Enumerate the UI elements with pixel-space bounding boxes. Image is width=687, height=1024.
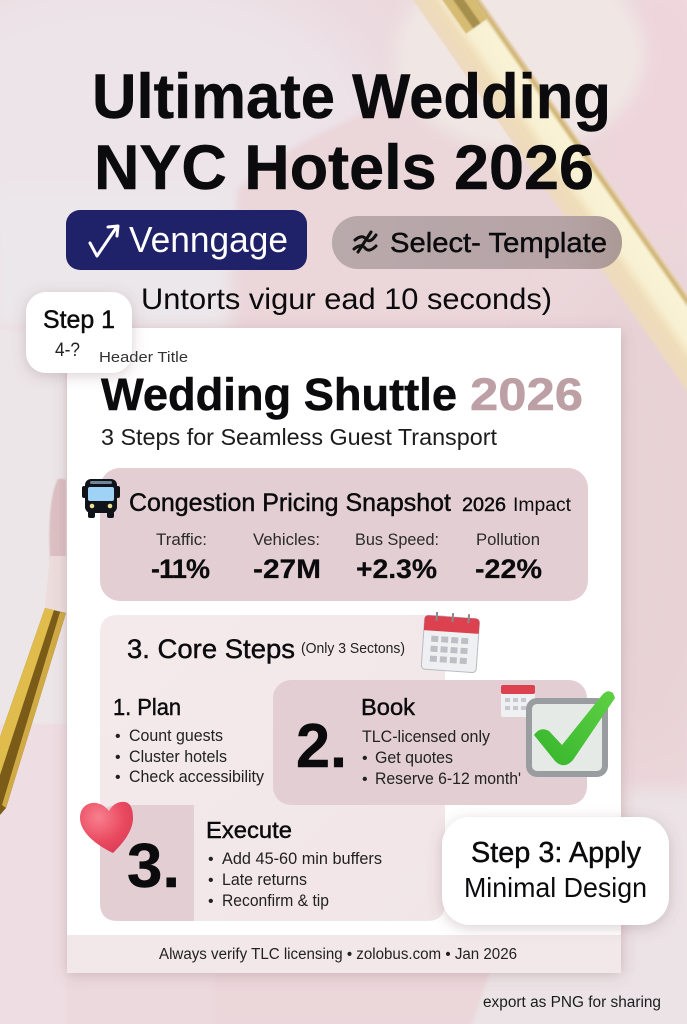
- icon: small calendar: [501, 685, 535, 717]
- stat: vehicles: Vehicles:: [253, 530, 320, 549]
- stat: bus speed: Bus Speed:: [355, 530, 439, 549]
- snapshot heading: Congestion Pricing Snapshot: [129, 489, 451, 517]
- panel: step 3 execute: Add 45-60 min buffers: [222, 850, 382, 868]
- button: Venngage: Venngage: [129, 219, 288, 260]
- step 1: plan: 1. Plan: [113, 694, 181, 720]
- footer band: Always verify TLC licensing • zolobus.com • Jan 2026: [159, 946, 517, 963]
- button: Select Template: [332, 216, 622, 269]
- stat: vehicles: [253, 530, 321, 584]
- stat: traffic: Traffic:: [156, 530, 207, 549]
- panel: step 2 book: Reserve 6-12 month': [375, 769, 521, 788]
- badge: step 1: Step 1: [43, 306, 115, 334]
- panel: step 3 execute: Late returns: [222, 871, 307, 889]
- stat: traffic: [151, 530, 210, 584]
- stat: pollution: -22%: [475, 554, 542, 584]
- stat: bus speed: [355, 530, 439, 584]
- panel: step 3 execute: •: [208, 872, 214, 889]
- panel: step 2 book: [273, 680, 615, 805]
- title: Ultimate Wedding: [92, 62, 611, 132]
- panel: core steps: [100, 611, 480, 921]
- snapshot heading: 2026: [462, 495, 506, 516]
- badge: step 1: [26, 292, 132, 373]
- panel: step 2 book: TLC-licensed only: [362, 727, 490, 746]
- stat: bus speed: +2.3%: [356, 554, 437, 584]
- callout: step 3 apply: Step 3: Apply: [471, 837, 641, 869]
- panel: step 3 execute: Execute: [206, 817, 292, 843]
- core steps heading: (Only 3 Sectons): [301, 640, 405, 657]
- panel: step 3 execute: Reconfirm & tip: [222, 892, 329, 910]
- panel: step 2 book: Book: [361, 694, 415, 720]
- title: NYC Hotels 2026: [94, 133, 594, 203]
- header text block: Header Title: [99, 349, 188, 366]
- note: export: export as PNG for sharing: [483, 994, 661, 1011]
- header text block: [99, 349, 583, 450]
- stat: pollution: Pollution: [476, 530, 540, 549]
- core steps heading: 3. Core Steps: [127, 634, 295, 664]
- footer band: [67, 935, 621, 973]
- icon: calendar: [421, 611, 480, 673]
- icon: bus: [82, 479, 120, 518]
- step 1: plan: Cluster hotels: [129, 748, 227, 766]
- core steps heading: [127, 634, 405, 664]
- step 1: plan: [113, 694, 265, 786]
- snapshot heading: Impact: [513, 495, 572, 516]
- icon: heart: [80, 802, 133, 853]
- panel: step 2 book: 2.: [296, 712, 347, 781]
- step 1: plan: Count guests: [129, 727, 223, 745]
- title: [92, 62, 611, 203]
- icon: green check box: [529, 691, 615, 774]
- step 1: plan: •: [115, 769, 121, 786]
- step 1: plan: Check accessibility: [129, 768, 265, 786]
- icon: select glyph: [354, 232, 376, 252]
- stat: traffic: -11%: [151, 554, 210, 584]
- step 1: plan: •: [115, 728, 121, 745]
- header text block: 2026: [470, 369, 583, 420]
- subtitle: Untorts vigur ead 10 seconds): [141, 283, 552, 316]
- panel: step 2 book: Get quotes: [375, 748, 453, 767]
- header text block: Wedding Shuttle: [101, 369, 457, 420]
- badge: step 1: 4-?: [55, 340, 80, 361]
- panel: main card: [67, 328, 621, 973]
- panel: step 3 execute: •: [208, 851, 214, 868]
- panel: step 3 execute: 3.: [127, 832, 180, 901]
- header text block: 3 Steps for Seamless Guest Transport: [101, 424, 497, 450]
- panel: step 3 execute: •: [208, 893, 214, 910]
- callout: step 3 apply: Minimal Design: [464, 872, 647, 903]
- button: Select Template: Select- Template: [390, 227, 607, 258]
- panel: congestion pricing snapshot: [82, 468, 588, 601]
- icon: gold pen left: [0, 479, 66, 815]
- icon: check arrow: [90, 226, 118, 256]
- callout: step 3 apply: [442, 817, 669, 925]
- panel: step 2 book: •: [362, 750, 368, 767]
- panel: step 2 book: •: [362, 771, 368, 788]
- icon: gold pen top right: [412, 0, 687, 392]
- panel: step 3 execute: [100, 805, 382, 921]
- button: Venngage: [66, 210, 307, 270]
- stat: pollution: [475, 530, 542, 584]
- step 1: plan: •: [115, 749, 121, 766]
- stat: vehicles: -27M: [253, 554, 321, 584]
